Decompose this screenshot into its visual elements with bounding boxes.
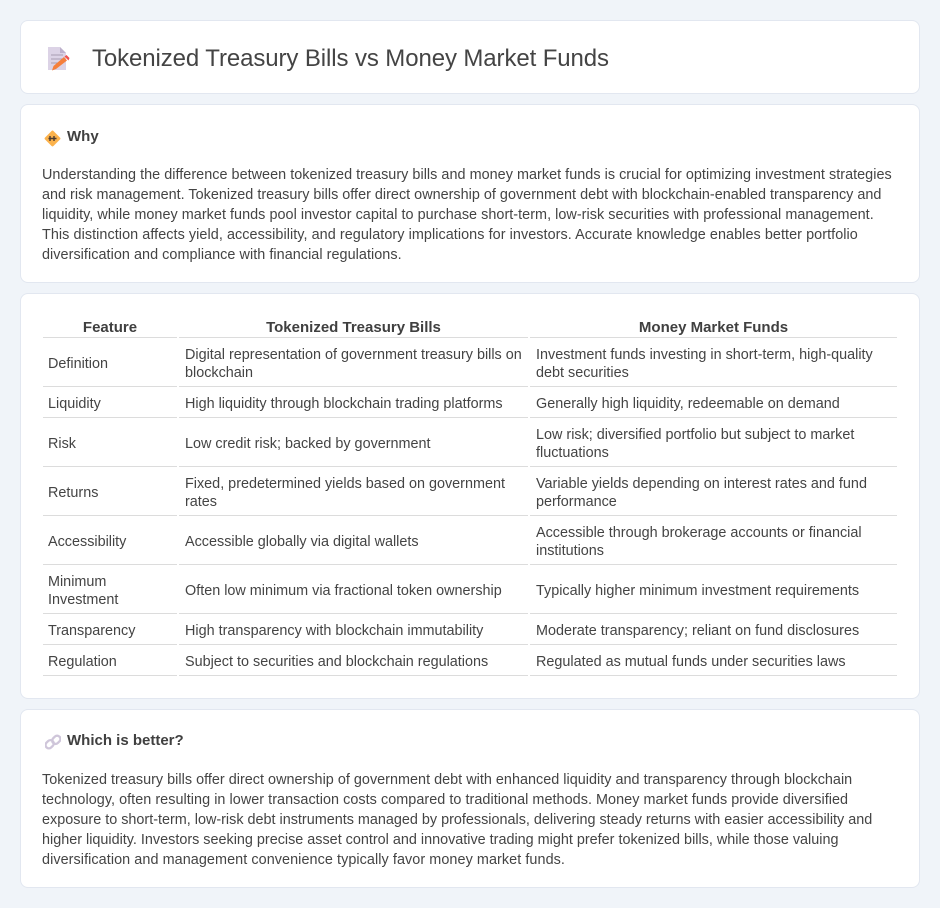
row: definition: Investment funds investing in short-term, high-quality bbox=[536, 347, 873, 363]
table header row: Money Market Funds bbox=[639, 319, 788, 336]
text block: which is better paragraph: technology, often resulting in lower transaction costs compared to traditional methods. Money market funds provide diversified bbox=[42, 792, 848, 808]
text block: why paragraph: This distinction affects yield, accessibility, and regulatory implications for investors. Accurate knowledge enables better portfolio bbox=[42, 227, 858, 243]
panel: comparison table bbox=[20, 293, 920, 699]
row: liquidity: Generally high liquidity, redeemable on demand bbox=[536, 396, 840, 412]
row: returns: Fixed, predetermined yields based on government bbox=[185, 476, 505, 492]
text block: which is better paragraph: higher liquidity. Investors seeking precise asset control and innovative trading might prefer tokenized bills, while those valuing bbox=[42, 832, 838, 848]
panel: why bbox=[20, 104, 920, 283]
row: definition: Digital representation of government treasury bills on bbox=[185, 347, 522, 363]
row: transparency bbox=[48, 623, 859, 639]
heading: which is better: Which is better? bbox=[67, 732, 184, 749]
row: risk: Risk bbox=[48, 436, 76, 452]
row: accessibility: institutions bbox=[536, 543, 604, 559]
text block: why paragraph bbox=[42, 167, 892, 263]
icon: warning diamond bbox=[44, 130, 60, 146]
row: returns: Variable yields depending on interest rates and fund bbox=[536, 476, 867, 492]
row: minimum investment bbox=[48, 574, 859, 608]
row: minimum investment: Minimum bbox=[48, 574, 106, 590]
row: regulation bbox=[48, 654, 846, 670]
row: liquidity: High liquidity through blockchain trading platforms bbox=[185, 396, 503, 412]
row: minimum investment: Investment bbox=[48, 592, 118, 608]
text block: why paragraph: Understanding the difference between tokenized treasury bills and money market funds is crucial for optimizing investment strategies bbox=[42, 167, 892, 183]
row: accessibility: Accessibility bbox=[48, 534, 126, 550]
row: regulation: Regulation bbox=[48, 654, 117, 670]
row: transparency: Transparency bbox=[48, 623, 135, 639]
row: liquidity bbox=[48, 396, 840, 412]
text block: which is better paragraph: Tokenized treasury bills offer direct ownership of government debt with enhanced liquidity and transparency through blockchain bbox=[42, 772, 852, 788]
row: minimum investment: Typically higher minimum investment requirements bbox=[536, 583, 859, 599]
table header row: Tokenized Treasury Bills bbox=[266, 319, 441, 336]
icon: document with pencil bbox=[48, 47, 70, 70]
row: risk bbox=[48, 427, 854, 461]
row: definition bbox=[48, 347, 873, 381]
panel: title header bbox=[20, 20, 920, 94]
row: definition: Definition bbox=[48, 356, 108, 372]
row: accessibility: Accessible through brokerage accounts or financial bbox=[536, 525, 862, 541]
text block: which is better paragraph bbox=[42, 772, 872, 868]
table header row bbox=[83, 319, 788, 336]
row: returns: Returns bbox=[48, 485, 98, 501]
row: accessibility bbox=[48, 525, 862, 559]
panel: which is better bbox=[20, 709, 920, 888]
heading: why: Why bbox=[67, 128, 99, 145]
row: regulation: Subject to securities and blockchain regulations bbox=[185, 654, 488, 670]
row: definition: blockchain bbox=[185, 365, 253, 381]
row: accessibility: Accessible globally via digital wallets bbox=[185, 534, 419, 550]
row: transparency: Moderate transparency; reliant on fund disclosures bbox=[536, 623, 859, 639]
row: risk: Low credit risk; backed by government bbox=[185, 436, 431, 452]
row: returns: performance bbox=[536, 494, 617, 510]
row: risk: fluctuations bbox=[536, 445, 609, 461]
text block: why paragraph: and risk management. Tokenized treasury bills offer direct ownership of government debt with blockchain-enabled transparency and bbox=[42, 187, 881, 203]
text block: which is better paragraph: diversification and management convenience typically favor money market funds. bbox=[42, 852, 565, 868]
row: definition: debt securities bbox=[536, 365, 629, 381]
row: returns: rates bbox=[185, 494, 217, 510]
row: transparency: High transparency with blockchain immutability bbox=[185, 623, 483, 639]
icon: chain link bbox=[45, 734, 61, 750]
row: risk: Low risk; diversified portfolio but subject to market bbox=[536, 427, 854, 443]
row: returns bbox=[48, 476, 867, 510]
table header row: Feature bbox=[83, 319, 137, 336]
text block: why paragraph: diversification and compliance with financial regulations. bbox=[42, 247, 402, 263]
row: regulation: Regulated as mutual funds under securities laws bbox=[536, 654, 846, 670]
title: Tokenized Treasury Bills vs Money Market Funds bbox=[92, 45, 609, 72]
row: minimum investment: Often low minimum via fractional token ownership bbox=[185, 583, 502, 599]
row: liquidity: Liquidity bbox=[48, 396, 101, 412]
text block: why paragraph: liquidity, while money market funds pool investor capital to purchase short-term, low-risk securities with professional management. bbox=[42, 207, 874, 223]
text block: which is better paragraph: exposure to short-term, low-risk debt instruments managed by professionals, delivering steady returns with easier accessibility and bbox=[42, 812, 872, 828]
